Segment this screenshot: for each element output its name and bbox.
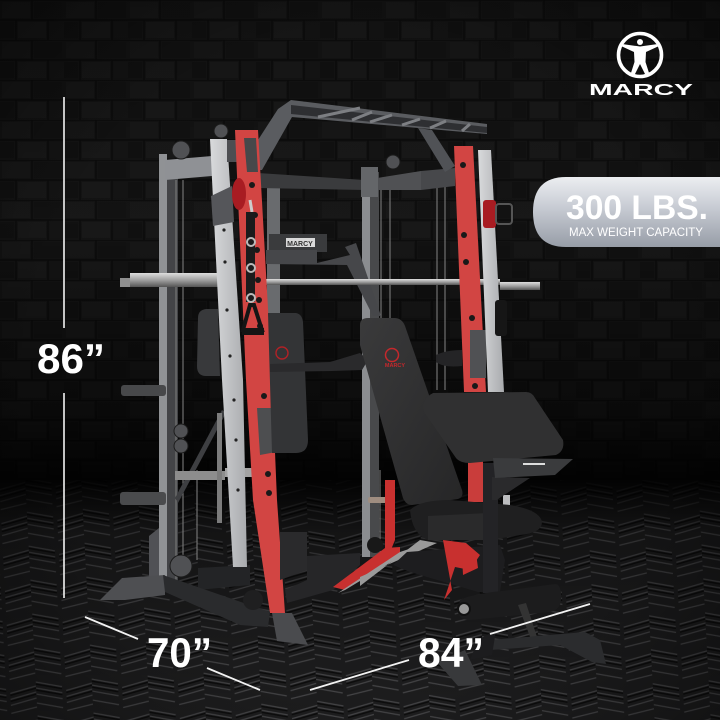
- pull-up bar frame: [258, 100, 487, 172]
- dimension: depth 84 inches: [310, 604, 590, 690]
- rear left post: [149, 154, 178, 588]
- capacity value: 300 LBS.: [566, 189, 708, 227]
- background: brick wall: [0, 0, 720, 490]
- dimension: width 70 inches: 70”: [147, 629, 212, 676]
- center brand bracket: [266, 234, 381, 316]
- left red upright: [235, 130, 285, 613]
- base frame: red ratchet: [333, 480, 412, 593]
- weight capacity badge: [533, 177, 720, 247]
- base frame: left: [100, 532, 360, 645]
- center brand bracket: MARCY: [287, 241, 313, 248]
- right silver upright: [478, 150, 512, 505]
- rear seat pad: MARCY: [273, 364, 292, 370]
- cables: [176, 180, 445, 580]
- background: rubber tile floor: [0, 480, 720, 720]
- barbell: [120, 273, 540, 290]
- weight bench: seat: [410, 500, 542, 540]
- weight bench: frame: [360, 463, 530, 600]
- Marcy logo: [589, 34, 694, 99]
- weight bench: back rest: MARCY: [385, 363, 405, 369]
- left silver upright: [210, 139, 247, 567]
- logo emblem: [618, 34, 662, 76]
- base frame: rear rail: [198, 565, 250, 590]
- weight bench: back rest: [360, 318, 462, 505]
- rear right post: [362, 172, 379, 557]
- arm handle: [270, 350, 462, 372]
- red pulley and strap handle: [232, 178, 264, 335]
- dimension: width 70 inches: [85, 617, 260, 690]
- middle post: [267, 182, 280, 314]
- smith machine: [100, 100, 606, 686]
- dimension: depth 84 inches: 84”: [418, 629, 484, 676]
- top frame crossbeams: [165, 156, 455, 197]
- weight bench: preacher curl pad: [423, 392, 573, 478]
- logo wordmark: MARCY: [589, 82, 694, 99]
- weight bench: front foot: [437, 630, 606, 686]
- pulley stack: [170, 124, 400, 577]
- dimension: height 86 inches: 86”: [37, 335, 105, 382]
- badge background: [533, 177, 720, 247]
- right red upright: [454, 146, 486, 502]
- rear seat pad: [197, 309, 308, 453]
- rear diagonal brace and weight horns: [120, 385, 269, 523]
- weight bench: leg roller: [458, 584, 561, 642]
- capacity label: MAX WEIGHT CAPACITY: [569, 227, 703, 239]
